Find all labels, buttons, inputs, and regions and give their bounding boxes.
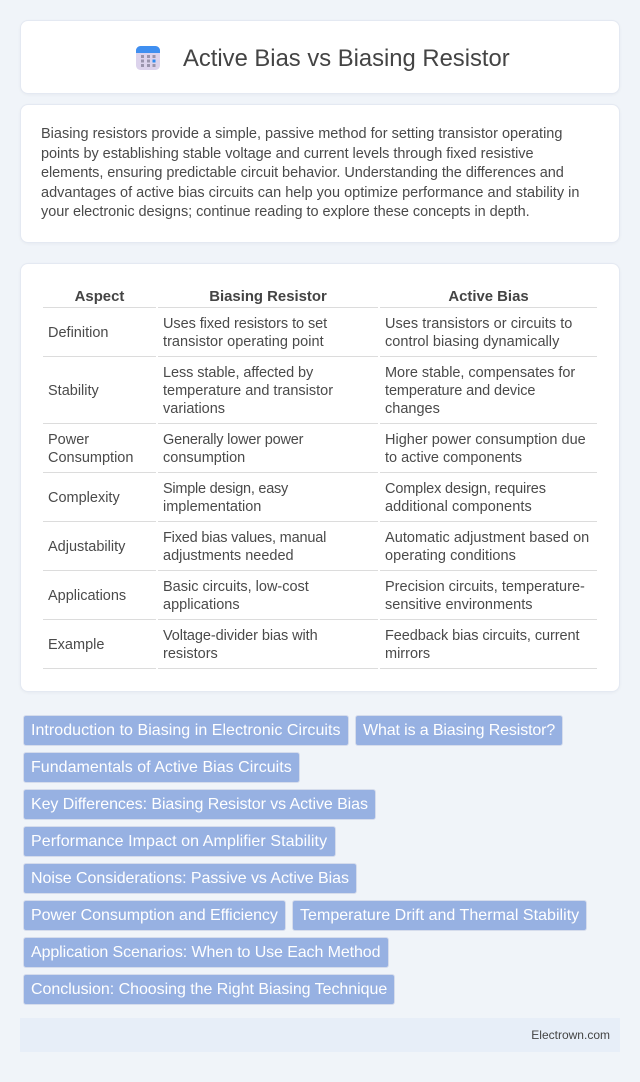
comparison table: additional components — [385, 499, 532, 515]
tag: What is a Biasing Resistor? — [363, 722, 555, 739]
tag — [23, 789, 376, 820]
row: power consumption: Consumption — [48, 450, 133, 466]
tag: Application Scenarios: When to Use Each Method — [31, 944, 380, 961]
row: stability: Stability — [48, 383, 99, 399]
icon: calendar app — [136, 46, 160, 70]
row: definition: Definition — [48, 325, 108, 341]
tag: Fundamentals of Active Bias Circuits — [31, 759, 292, 776]
comparison table: adjustments needed — [163, 548, 294, 564]
comparison table: operating conditions — [385, 548, 516, 564]
intro text: points by establishing stable voltage and current levels through fixed resistive — [41, 146, 534, 162]
tag: Introduction to Biasing in Electronic Circuits — [31, 722, 341, 739]
tag list: article sections — [23, 715, 587, 1005]
comparison table: Basic circuits, low-cost — [163, 579, 309, 595]
tag: Power Consumption and Efficiency — [31, 907, 278, 924]
comparison table: mirrors — [385, 646, 430, 662]
tag: Key Differences: Biasing Resistor vs Active Bias — [31, 796, 368, 813]
comparison table: resistors — [163, 646, 218, 662]
column header: active bias: Active Bias — [448, 289, 529, 305]
comparison table: to active components — [385, 450, 522, 466]
tag — [23, 974, 395, 1005]
comparison table: More stable, compensates for — [385, 365, 575, 381]
comparison table: consumption — [163, 450, 245, 466]
tag — [23, 937, 389, 968]
tag — [23, 863, 357, 894]
tag: Noise Considerations: Passive vs Active Bias — [31, 870, 349, 887]
row: complexity: Complexity — [48, 490, 120, 506]
comparison table: Feedback bias circuits, current — [385, 628, 579, 644]
tag: Performance Impact on Amplifier Stability — [31, 833, 327, 850]
tag — [23, 900, 286, 931]
intro text: advantages of active bias circuits can help you optimize performance and stability in — [41, 185, 579, 201]
tag — [292, 900, 587, 931]
intro text: elements, ensuring predictable circuit behavior. Understanding the differences and — [41, 165, 564, 181]
column header: aspect: Aspect — [75, 289, 124, 305]
tag — [23, 752, 300, 783]
comparison table: sensitive environments — [385, 597, 532, 613]
comparison table: Uses fixed resistors to set — [163, 316, 327, 332]
row: power consumption: Power — [48, 432, 89, 448]
row: example: Example — [48, 637, 104, 653]
comparison table: Simple design, easy — [163, 481, 288, 497]
comparison table: control biasing dynamically — [385, 334, 559, 350]
comparison table: changes — [385, 401, 440, 417]
tag — [23, 715, 349, 746]
tag — [355, 715, 563, 746]
comparison table: Voltage-divider bias with — [163, 628, 318, 644]
row: power consumption — [48, 432, 133, 466]
comparison table: Higher power consumption due — [385, 432, 586, 448]
comparison table: implementation — [163, 499, 261, 515]
comparison table: temperature and transistor — [163, 383, 333, 399]
comparison table: Precision circuits, temperature- — [385, 579, 585, 595]
intro text: Biasing resistors provide a simple, passive method for setting transistor operating — [41, 126, 562, 142]
footer bar — [20, 1018, 620, 1052]
comparison table: Generally lower power — [163, 432, 303, 448]
intro text: your electronic designs; continue reading to explore these concepts in depth. — [41, 204, 530, 220]
comparison table: Uses transistors or circuits to — [385, 316, 572, 332]
comparison table: variations — [163, 401, 225, 417]
intro text — [41, 126, 579, 220]
title: Active Bias vs Biasing Resistor — [183, 45, 510, 72]
comparison table: Less stable, affected by — [163, 365, 313, 381]
comparison table: temperature and device — [385, 383, 535, 399]
comparison table: applications — [163, 597, 240, 613]
header card — [20, 20, 620, 94]
comparison table: Automatic adjustment based on — [385, 530, 589, 546]
comparison table: transistor operating point — [163, 334, 324, 350]
tag: Conclusion: Choosing the Right Biasing Technique — [31, 981, 387, 998]
comparison table: Complex design, requires — [385, 481, 546, 497]
tag: Temperature Drift and Thermal Stability — [300, 907, 579, 924]
tag — [23, 826, 336, 857]
column header: biasing resistor: Biasing Resistor — [209, 289, 327, 305]
comparison table: Fixed bias values, manual — [163, 530, 326, 546]
comparison table panel — [20, 263, 620, 692]
comparison table — [43, 289, 597, 669]
row: applications: Applications — [48, 588, 126, 604]
footer credit: Electrown.com — [531, 1028, 610, 1042]
row: adjustability: Adjustability — [48, 539, 125, 555]
intro panel — [20, 104, 620, 243]
